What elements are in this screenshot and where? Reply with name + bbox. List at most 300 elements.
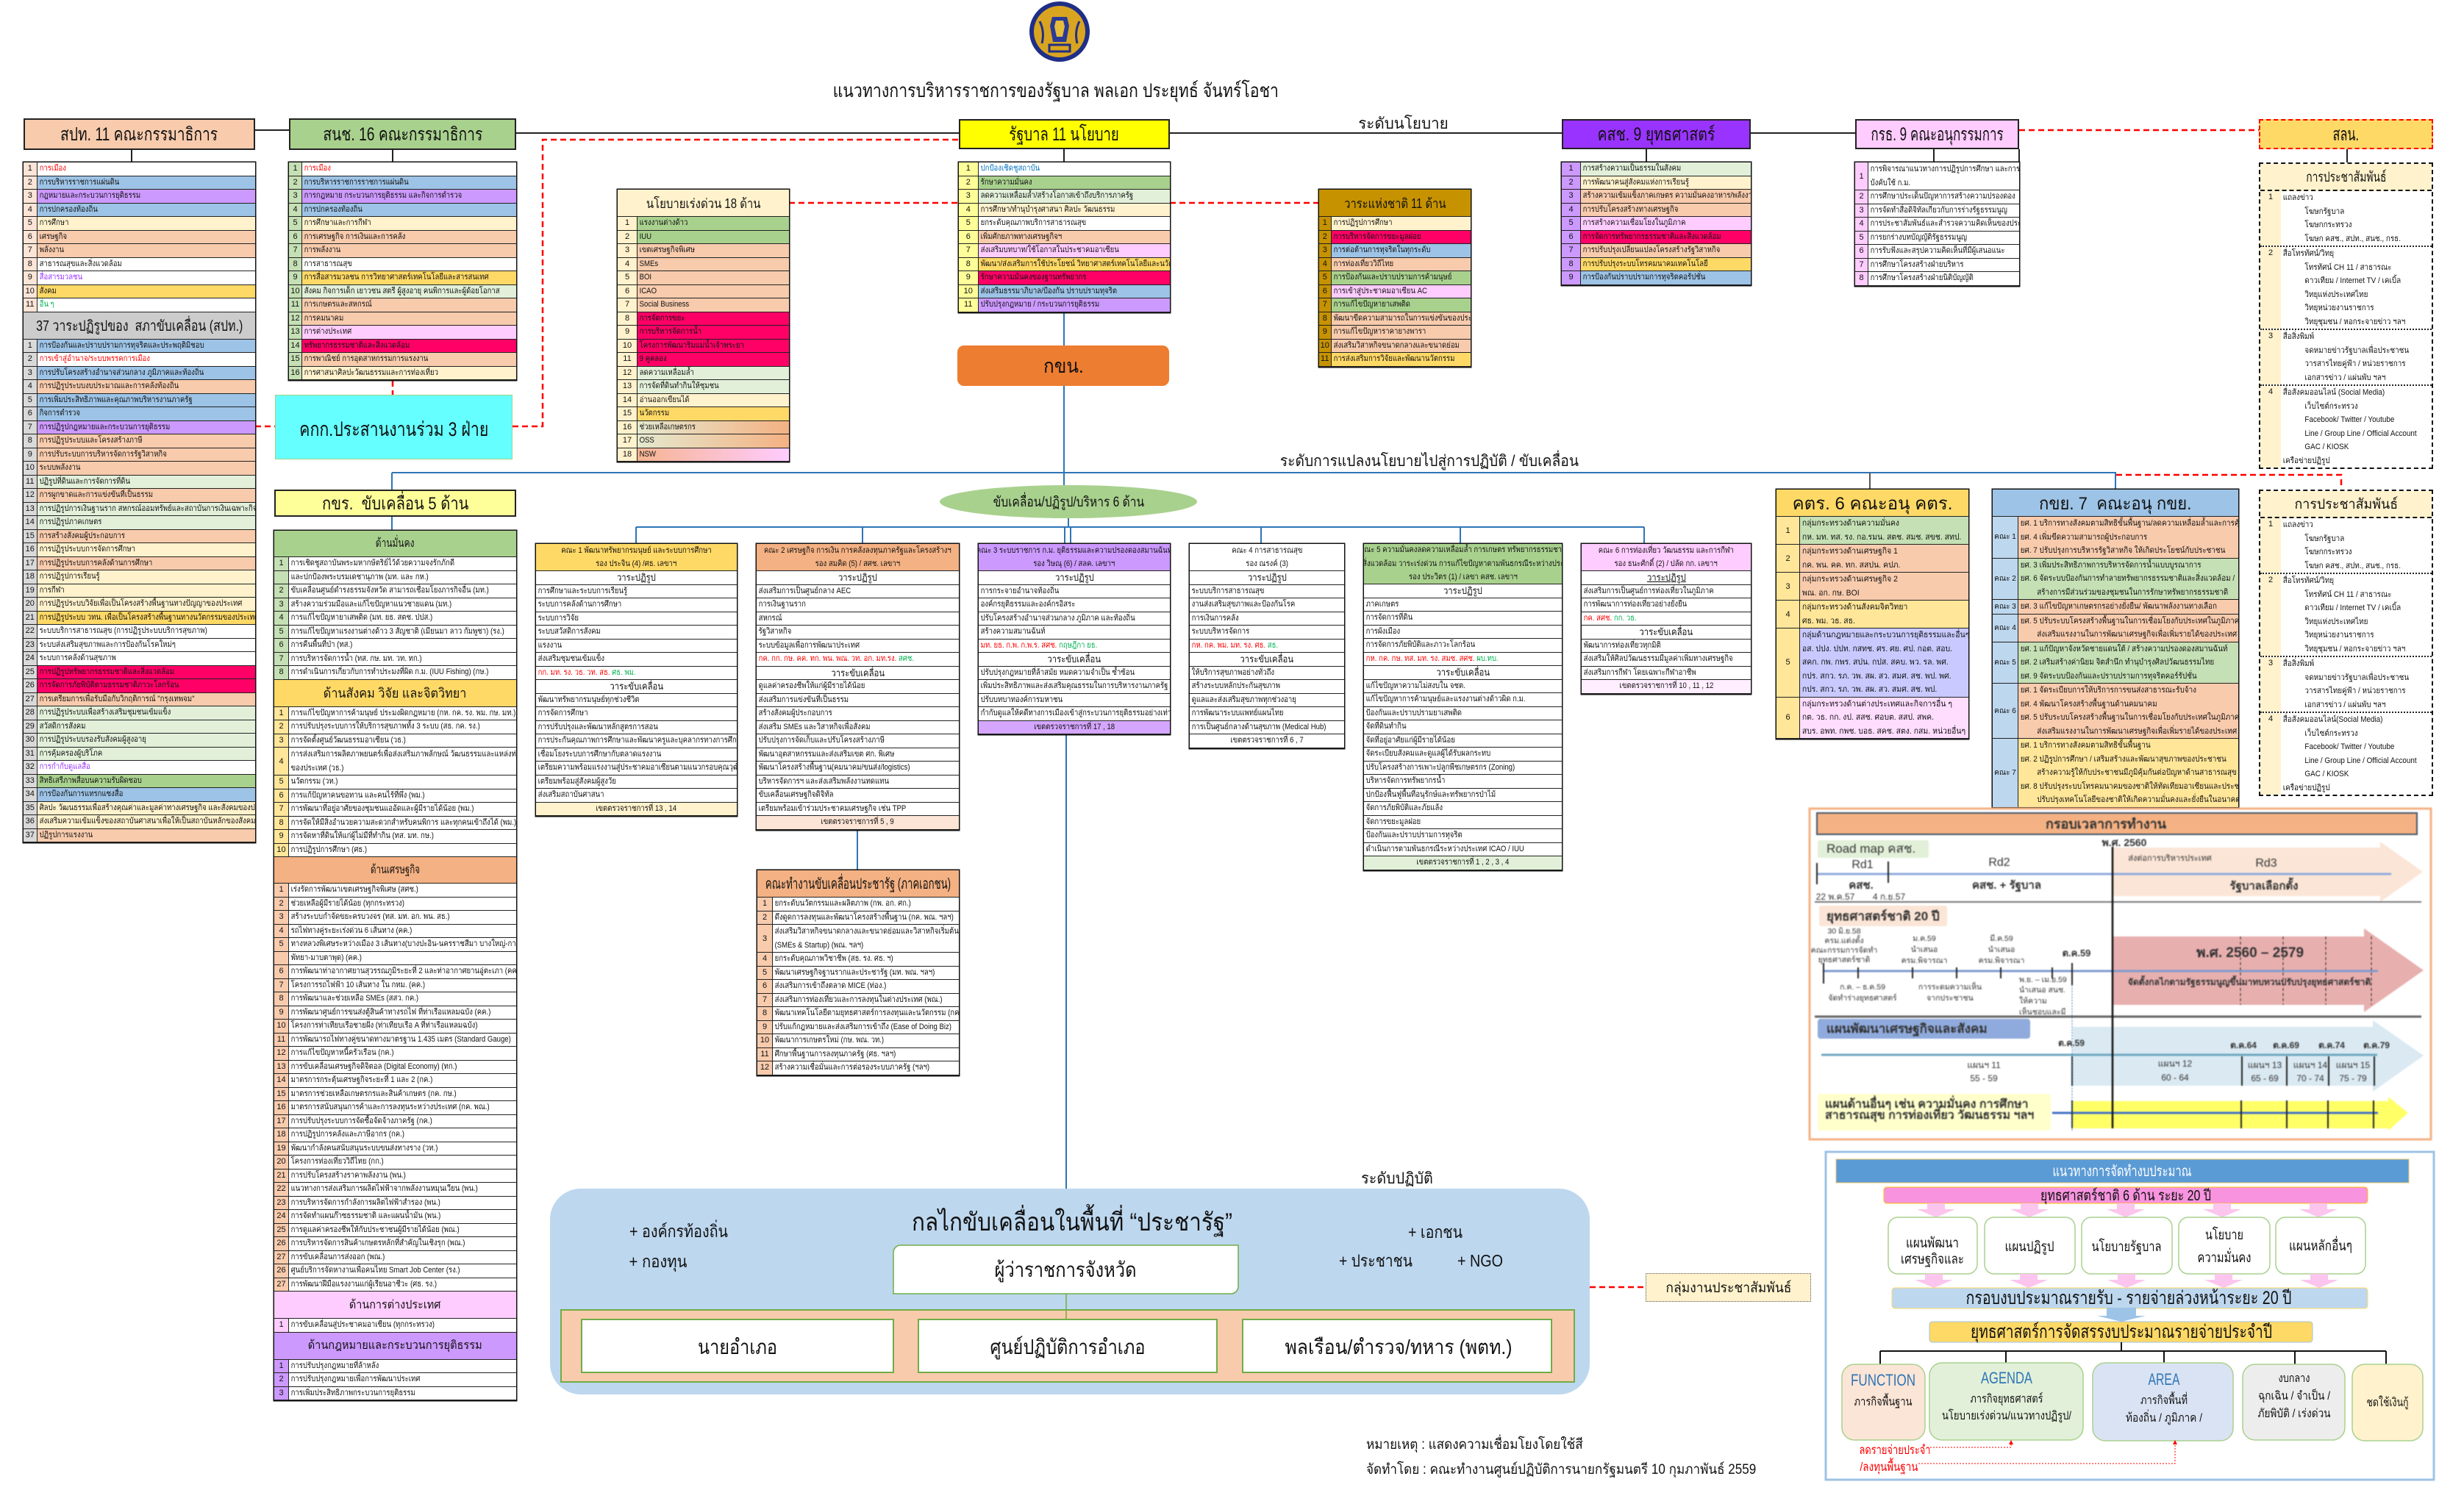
list: team 4 agendas: งานส่งเสริมสุขภาพและป้องกันโรค xyxy=(1192,600,1295,609)
banner: annual budget allocation strategy: ยุทธศาสตร์การจัดสรรงบประมาณรายจ่ายประจำปี xyxy=(1971,1322,2272,1343)
list: society, research and psychology: 2 xyxy=(279,722,284,731)
panel: NRSA committees and 37 reform agendas: สาธารณสุขและสิ่งแวดล้อม xyxy=(39,259,121,268)
arrow: national strategy 20 years: นำเสนอ xyxy=(1988,945,2015,954)
list: KorTorRor groups: กลุ่มกระทรวงด้านเศรษฐกิจ 1 xyxy=(1802,547,1898,556)
list: economy: มาตรการสนับสนุนการค้าและการลงทุนระหว่างประเทศ (กค. พณ.) xyxy=(291,1103,490,1111)
box: district operations centre xyxy=(918,1319,1217,1372)
list: civil-state working group items: (SMEs & Startup) (พณ. ฯลฯ) xyxy=(775,941,863,950)
arrow: economic and social development plans: ต.ค.59 xyxy=(2058,1038,2085,1048)
heading: law and justice xyxy=(274,1332,516,1360)
panel: government 11 policies list: 7 xyxy=(966,246,971,254)
arrow: roadmap: Rd1 xyxy=(1851,859,1874,871)
panel: NCPO 9 strategies list: 8 xyxy=(1568,259,1574,268)
panel: NLA 16 committees list: การเมือง xyxy=(304,164,331,173)
list: 37 reform agendas: สวัสดิการสังคม xyxy=(39,722,85,731)
list: 37 reform agendas: 3 xyxy=(28,368,32,377)
header: NLA 16 committees xyxy=(289,118,516,150)
ellipse: drive, implement, manage 6 areas: ขับเคลื่อน/ปฏิรูป/บริหาร 6 ด้าน xyxy=(993,494,1144,510)
panel: NLA 16 committees list: 8 xyxy=(293,259,298,268)
list: security: การเชิดชูสถาบันพระมหากษัตริย์ไว้ด้วยความจงรักภักดี xyxy=(291,559,454,567)
boxes: five master plans: แผนหลักอื่นๆ xyxy=(2289,1236,2352,1254)
list: 37 reform agendas: 24 xyxy=(26,653,35,662)
list: economy: 10 xyxy=(276,1021,286,1030)
list: 37 reform agendas: 8 xyxy=(28,436,32,445)
list: 37 reform agendas: กิจการตำรวจ xyxy=(39,409,80,418)
list: KorKhorYor groups: คณะ 5 xyxy=(1994,659,2016,667)
box: KorKhorNor committee xyxy=(957,345,1169,386)
list: 37 reform agendas: ส่งเสริมความเข้มแข็งของสถาบันศาสนาเพื่อให้เป็นสถาบันหลักของสังคม xyxy=(39,817,255,825)
list: KorTorRor groups: 2 xyxy=(1785,554,1790,563)
heading: team 4: รอง ณรงค์ (3) xyxy=(1246,559,1288,568)
list: society, research and psychology: การจัดให้มีสิ่งอำนวยความสะดวกสำหรับคนพิการ และทุกคนเข้าถึงได้ (พม.) xyxy=(291,818,516,827)
arrow: national strategy 20 years: 30 มิ.ย.58 xyxy=(1827,927,1861,936)
box: agenda: AGENDA xyxy=(1981,1369,2032,1387)
heading: team 5: รอง ประวิตร (1) / เลขา คสช. เลขาฯ xyxy=(1409,573,1517,581)
list: urgent policies: 7 xyxy=(625,300,629,309)
box: central budget: งบกลาง xyxy=(2278,1372,2310,1385)
panel: deputy PM team 3 xyxy=(979,544,1170,734)
list: KorTorRor groups: พณ. อก. กษ. BOI xyxy=(1802,588,1860,597)
list: economy: 17 xyxy=(276,1117,286,1125)
list: team 1 agendas: วาระปฏิรูป xyxy=(617,572,656,583)
list: public relations channels: Line / Group Line / Official Account xyxy=(2304,756,2417,764)
box: civil police military: พลเรือน/ตำรวจ/ทหาร (พตท.) xyxy=(1285,1336,1512,1358)
list: public relations channels: เว็บไซต์กระทรวง xyxy=(2304,729,2358,738)
list: public relations channels: วิทยุแห่งประเทศไทย xyxy=(2304,617,2368,626)
list: public relations channels: วารสารไทยคู่ฟ้า / หน่วยราชการ xyxy=(2304,687,2406,695)
list: 37 reform agendas: ระบบการคลังด้านสุขภาพ xyxy=(39,653,115,662)
panel: government 11 policies list: 9 xyxy=(966,273,971,282)
list: KorKhorYor groups: คณะ 2 xyxy=(1994,575,2016,583)
list: national agenda: 4 xyxy=(1323,259,1327,268)
panel: NRSA committees and 37 reform agendas: 7 xyxy=(28,246,32,254)
text block: prepared by: จัดทำโดย : คณะทำงานศูนย์ปฏิบัติการนายกรัฐมนตรี 10 กุมภาพันธ์ 2559 xyxy=(1366,1462,1756,1478)
list: national agenda: การแก้ไขปัญหาราคายางพารา xyxy=(1333,327,1426,336)
list: team 3 agendas: วาระขับเคลื่อน xyxy=(1048,653,1101,665)
list: urgent policies: BOI xyxy=(640,273,651,282)
list: KorKhorYor groups: ยศ. 2 ปฏิรูปการศึกษา / เสริมสร้างและพัฒนาสุขภาพของประชาชน xyxy=(2021,754,2226,763)
panel: NLA 16 committees list: การพลังงาน xyxy=(304,246,340,254)
panel: NCPO 9 strategies list: การสร้างความเป็นธรรมในสังคม xyxy=(1583,164,1681,173)
panel: NLA 16 committees list: 7 xyxy=(293,246,298,254)
list: KorKhorYor groups: ยศ. 7 ปรับปรุงการบริหารรัฐวิสาหกิจ ให้เกิดประโยชน์กับประชาชน xyxy=(2021,546,2225,555)
list: economy: 18 xyxy=(276,1130,286,1139)
heading: public relations xyxy=(2260,164,2432,191)
heading: foreign affairs: ด้านการต่างประเทศ xyxy=(349,1298,441,1311)
list: team 1 agendas: วาระขับเคลื่อน xyxy=(610,681,663,692)
list: public relations channels: โฆษก คสช., สปท., สนช., กรธ. xyxy=(2304,234,2401,243)
list: economy: 21 xyxy=(276,1171,286,1180)
heading: team 6 xyxy=(1582,544,1751,571)
list: civil-state working group items: พัฒนาการเกษตรใหม่ (กษ. พณ. วท.) xyxy=(775,1036,884,1045)
list: KorKhorYor groups: คณะ 6 xyxy=(1994,707,2016,714)
arrow: economic and social development plans: ต.ค.64 xyxy=(2230,1040,2257,1050)
list: security: สร้างความร่วมมือและแก้ไขปัญหาแนวชายแดน (มท.) xyxy=(291,600,451,609)
list: economy: 23 xyxy=(276,1198,286,1207)
list: 37 reform agendas: 17 xyxy=(26,559,35,567)
list: economy: 2 xyxy=(279,899,284,908)
panel: government 11 policies list: ส่งเสริมธรรมาภิบาล/ป้องกัน ปราบปรามทุจริต xyxy=(980,287,1117,296)
panel: working timeframe timeline xyxy=(1807,807,2432,1141)
list: foreign affairs: 1 xyxy=(279,1320,284,1329)
arrow: economic and social development plans: แผนฯ 13 xyxy=(2248,1060,2282,1070)
box: function: ภารกิจพื้นฐาน xyxy=(1854,1393,1913,1408)
list: national agenda: 7 xyxy=(1323,300,1327,309)
list: KorKhorYor groups: ยศ. 2 เสริมสร้างค่านิยม จิตสำนึก ทำนุบำรุงศิลปวัฒนธรรมไทย xyxy=(2021,658,2214,667)
arrow: national strategy 20 years: ม.ค.59 xyxy=(1913,934,1936,943)
list: urgent policies: เขตเศรษฐกิจพิเศษ xyxy=(640,246,695,254)
panel: government 11 policies list: 8 xyxy=(966,259,971,268)
panel: government 11 policies list: 6 xyxy=(966,232,971,241)
list: urgent policies: 11 xyxy=(623,354,632,363)
panel: NRSA committees and 37 reform agendas: 2 xyxy=(28,178,32,187)
list: economy: 12 xyxy=(276,1048,286,1057)
icon: cabinet secretariat seal xyxy=(1029,1,1090,62)
heading: budget guidelines xyxy=(1836,1159,2409,1183)
list: security xyxy=(274,557,516,680)
heading: society, research and psychology: ด้านสังคม วิจัย และจิตวิทยา xyxy=(324,686,467,701)
list: economy: 24 xyxy=(276,1211,286,1220)
marker: year 2560 line: พ.ศ. 2560 xyxy=(2102,837,2147,848)
panel: CDC subcommittees list: บังคับใช้ ก.ม. xyxy=(1871,178,1910,187)
heading: security: ด้านมั่นคง xyxy=(376,537,415,550)
panel: NRSA committees and 37 reform agendas: เศรษฐกิจ xyxy=(39,232,67,241)
list: society, research and psychology: การจัดตั้งศูนย์วัฒนธรรมอาเซียน (วธ.) xyxy=(291,736,406,745)
list: 37 reform agendas: 4 xyxy=(28,382,32,390)
list: KorTorRor groups: กลุ่มกระทรวงด้านความมั่นคง xyxy=(1802,519,1899,528)
heading: team 1: รอง ประจิน (4) /ศธ. เลขาฯ xyxy=(596,559,677,568)
list: public relations channels: ดาวเทียม / Internet TV / เคเบิ้ล xyxy=(2304,603,2401,612)
list: public relations channels: โฆษกกระทรวง xyxy=(2304,548,2351,556)
list: civil-state working group items: ดึงดูดการลงทุนและพัฒนาโครงสร้างพื้นฐาน (กค. พณ. ฯลฯ) xyxy=(775,913,954,922)
heading: practice level: ระดับปฏิบัติ xyxy=(1361,1170,1433,1186)
panel: CDC subcommittees list: การรับฟังและสรุปความคิดเห็นที่มีผู้เสนอแนะ xyxy=(1871,246,2004,255)
list: economy: การปรับปรุงระบบการจัดซื้อจัดจ้างภาครัฐ (กค.) xyxy=(291,1117,432,1125)
arrow: roadmap: ส่งต่อการบริหารประเทศ xyxy=(2128,854,2212,863)
list: urgent policies: 8 xyxy=(625,314,629,323)
list: economy: มาตรการกระตุ้นเศรษฐกิจระยะที่ 1 และ 2 (กค.) xyxy=(291,1075,432,1084)
heading: public relations: การประชาสัมพันธ์ xyxy=(2306,169,2386,185)
list: law and justice: การปรับปรุงกฎหมายเพื่อการพัฒนาประเทศ xyxy=(291,1375,420,1383)
panel: public relations (implementation level) xyxy=(2259,490,2433,796)
list: economy: 19 xyxy=(276,1144,286,1153)
list: team 2 agendas: สร้างสังคมผู้ประกอบการ xyxy=(759,709,832,717)
arrow: national strategy 20 years: เห็นชอบและมี xyxy=(2019,1006,2066,1017)
list: civil-state working group items: ส่งเสริมการเข้าถึงตลาด MICE (ท่อง.) xyxy=(775,981,886,990)
heading: team 6: รอง ธนะศักดิ์ (2) / ปลัด กก. เลขาฯ xyxy=(1615,559,1718,568)
list: 37 reform agendas: การจัดการภัยพิบัติตามธรรมชาติภาวะโลกร้อน xyxy=(39,681,179,690)
list: security: 6 xyxy=(279,640,284,649)
panel: NCPO 9 strategies list: การปรับปรุงระบบโทรคมนาคมเทคโนโลยี xyxy=(1583,259,1708,268)
list: national agenda xyxy=(1319,217,1471,367)
arrow: framework to annual strategy xyxy=(2097,1308,2146,1322)
list: public relations channels: เอกสารข่าว / แผ่นพับ ฯลฯ xyxy=(2304,700,2385,709)
list: economy: 5 xyxy=(279,939,284,948)
box: central budget: ฉุกเฉิน / จำเป็น / xyxy=(2258,1388,2330,1403)
panel: CDC subcommittees list: การพิจารณาแนวทางการปฏิรูปการศึกษา และการ xyxy=(1871,165,2019,173)
panel: CDC subcommittees list: การศึกษาประเด็นปัญหาการสร้างความปรองดอง xyxy=(1871,192,2015,201)
list: economy: การปรับโครงสร้างราคาพลังงาน (พน.) xyxy=(291,1171,406,1180)
panel: government 11 policies list: 10 xyxy=(964,287,973,296)
list: economy: การบริหารจัดการกำลังการผลิตไฟฟ้าสำรอง (พน.) xyxy=(291,1198,440,1207)
panel: NLA 16 committees list: การเศรษฐกิจ การเงินและการคลัง xyxy=(304,232,405,241)
callout: public relations group: กลุ่มงานประชาสัมพันธ์ xyxy=(1665,1281,1791,1295)
list: team 5 agendas: การจัดการที่ดิน xyxy=(1366,613,1413,622)
list: economy: 15 xyxy=(276,1089,286,1098)
list: public relations channels: วิทยุหน่วยงานราชการ xyxy=(2304,631,2374,640)
list: KorKhorYor groups: ส่งเสริมแรงงานในการพัฒนาเศรษฐกิจเพื่อเพิ่มรายได้ของประเทศ xyxy=(2037,630,2237,639)
list: public relations channels: สื่อโทรทัศน์/วิทยุ xyxy=(2283,249,2334,258)
list: team 2 agendas: พัฒนาอุตสาหกรรมและส่งเสริมเขต ศก. พิเศษ xyxy=(759,750,894,759)
arrow: national strategy 20 years xyxy=(1811,902,2424,1017)
list: KorTorRor groups: สบร. อพท. กพช. บอธ. สคช. สตง. กสม. หน่วยอื่นๆ xyxy=(1802,726,1965,735)
panel: KorKhorRor 5 areas lists xyxy=(274,531,516,1400)
list: urgent policies: SMEs xyxy=(640,259,658,268)
list: civil-state working group items: สร้างความเชื่อมั่นและการต่อรองระบบภาครัฐ (ฯลฯ) xyxy=(775,1063,929,1072)
panel: NCPO 9 strategies list: การป้องกันปราบปรามการทุจริตคอรัปชั่น xyxy=(1583,273,1705,282)
list: KorTorRor groups: กลุ่มกระทรวงด้านเศรษฐกิจ 2 xyxy=(1802,575,1898,584)
panel: deputy PM team 6 xyxy=(1582,544,1751,694)
list: urgent policies: 5 xyxy=(625,273,629,282)
list: national agenda: 8 xyxy=(1323,314,1327,323)
boxes: five master plans: นโยบาย xyxy=(2205,1226,2243,1243)
heading: team 1 xyxy=(536,544,737,571)
list: KorTorRor groups: 5 xyxy=(1785,658,1790,667)
list: national agenda: 5 xyxy=(1323,273,1327,282)
heading: team 2: รอง สมคิด (5) / สศช. เลขาฯ xyxy=(815,559,900,568)
list: 37 reform agendas: 35 xyxy=(26,803,35,812)
list: national agenda: การท่องเที่ยววิถีไทย xyxy=(1333,259,1393,268)
boxes: five master plans: ความมั่นคง xyxy=(2197,1247,2251,1266)
header: NRSA 11 committees xyxy=(24,118,255,150)
header: government 11 policies: รัฐบาล 11 นโยบาย xyxy=(1010,123,1119,144)
list: team 5 agendas: ปกป้องฟื้นฟูพื้นที่อนุรักษ์และทรัพยากรป่าไม้ xyxy=(1366,790,1496,799)
list: team 5 agendas: จัดระเบียบสังคมและดูแลผู้ได้รับผลกระทบ xyxy=(1366,749,1490,758)
list: public relations channels: โฆษกรัฐบาล xyxy=(2304,534,2344,542)
box: agenda: ภารกิจยุทธศาสตร์ xyxy=(1971,1391,2043,1406)
list: national agenda: การปฏิรูปการศึกษา xyxy=(1333,218,1392,227)
list: team 5 agendas: ภาคเกษตร xyxy=(1366,600,1399,609)
list: society, research and psychology: การพัฒนาที่อยู่อาศัยของชุมชนแออัดและผู้มีรายได้น้อย (พม.) xyxy=(291,804,474,813)
list: public relations channels: สื่อสังคมออนไลน์(Social Media) xyxy=(2283,715,2382,724)
box: area: ภารกิจพื้นที่ xyxy=(2140,1391,2188,1407)
panel: NLA 16 committees list: 13 xyxy=(290,327,300,336)
list: KorTorRor groups: สคก. กพ. กพร. สปน. กปส. สคบ. พว. รล. พศ. xyxy=(1802,658,1949,667)
list: team 5 agendas: ป้องกันและปราบปรามการทุจริต xyxy=(1366,831,1463,839)
list: security: 4 xyxy=(279,613,284,622)
arrow: national strategy 20 years: ครม.พิจารณา xyxy=(1979,956,2024,965)
panel: CDC subcommittees list: 7 xyxy=(1859,260,1864,269)
arrow: national strategy 20 years: จัดทำร่างยุทธศาสตร์ xyxy=(1828,993,1897,1003)
panel: government 11 policies list: 5 xyxy=(966,218,971,227)
list: team 5 agendas: แก้ไขปัญหาการค้ามนุษย์และแรงงานต่างด้าวผิด ก.ม. xyxy=(1366,695,1526,703)
list: economy: 8 xyxy=(279,994,284,1003)
callout: three-party joint coordination committee: คกก.ประสานงานร่วม 3 ฝ่าย xyxy=(299,418,488,440)
list: security: ขับเคลื่อนศูนย์ดำรงธรรมจังหวัด สามารถเชื่อมโยงภารกิจอื่น (มท.) xyxy=(291,586,489,595)
list: team 2 agendas: วาระปฏิรูป xyxy=(838,572,877,583)
list: national agenda: การแก้ไขปัญหายาเสพติด xyxy=(1333,300,1410,309)
header: government 11 policies xyxy=(959,119,1170,149)
list: economy: ช่วยเหลือผู้มีรายได้น้อย (ทุกกระทรวง) xyxy=(291,899,404,908)
list: urgent policies: โครงการพัฒนาริมแม่น้ำเจ้าพระยา xyxy=(640,341,744,350)
list: economy: พัฒนากำลังคนสนับสนุนระบบขนส่งทางราง (วท.) xyxy=(291,1144,438,1153)
panel: area mechanism Pracharat xyxy=(550,1189,1590,1394)
list: 37 reform agendas: 31 xyxy=(26,749,35,758)
list: KorTorRor groups: กต. วธ. กก. งป. สสช. ศอบต. สสป. สพค. xyxy=(1802,713,1934,722)
panel: NCPO 9 strategies list: การปรับปรุงเปลี่ยนแปลงโครงสร้างรัฐวิสาหกิจ xyxy=(1583,246,1720,254)
list: 37 reform agendas: 19 xyxy=(26,586,35,595)
list: 37 reform agendas: 27 xyxy=(26,695,35,703)
arrow: economic and social development plans: แผนฯ 14 xyxy=(2293,1060,2328,1070)
list: economy: การพัฒนารถไฟทางคู่ขนาดทางมาตรฐาน 1.435 เมตร (Standard Gauge) xyxy=(291,1035,511,1044)
panel: NRSA committees and 37 reform agendas: 8 xyxy=(28,259,32,268)
list: team 2 agendas: ขับเคลื่อนเศรษฐกิจดิจิทัล xyxy=(759,790,834,799)
list: team 5 agendas: จัดการขยะมูลฝอย xyxy=(1366,817,1421,826)
list: 37 reform agendas: การปฏิรูปกฎหมายและกระบวนการยุติธรรม xyxy=(39,423,170,431)
heading: society, research and psychology xyxy=(274,679,516,707)
list: security: การแก้ไขปัญหาแรงงานต่างด้าว 3 สัญชาติ (เมียนมา ลาว กัมพูชา) (รง.) xyxy=(291,627,504,636)
list: society, research and psychology: 4 xyxy=(279,757,284,766)
list: society, research and psychology xyxy=(274,707,516,857)
list: civil-state working group items: 6 xyxy=(763,981,767,990)
panel: NCPO 9 strategies list: 2 xyxy=(1568,178,1574,187)
arrow: national strategy 20 years: นำเสนอ สนช. xyxy=(2019,986,2065,995)
list: civil-state working group items: ยกระดับนวัตกรรมและผลิตภาพ (กพ. อก. ศก.) xyxy=(775,899,911,908)
list: team 5 agendas: เขตตรวจราชการที่ 1 , 2 , 3 , 4 xyxy=(1417,858,1509,867)
panel: NLA 16 committees list: 4 xyxy=(293,205,298,214)
list: public relations channels: เว็บไซต์กระทรวง xyxy=(2304,401,2358,410)
list: public relations channels: GAC / KIOSK xyxy=(2304,770,2349,778)
header: NCPO 9 strategies: คสช. 9 ยุทธศาสตร์ xyxy=(1598,123,1715,144)
banner: budget framework 20 years: กรอบงบประมาณรายรับ - รายจ่ายล่วงหน้าระยะ 20 ปี xyxy=(1966,1288,2291,1308)
panel: NCPO 9 strategies list: การปรับโครงสร้างทางเศรษฐกิจ xyxy=(1583,205,1678,214)
list: society, research and psychology: 10 xyxy=(276,845,286,854)
panel: government 11 policies list: ยกระดับคุณภาพบริการสาธารณสุข xyxy=(980,218,1086,227)
arrow: national strategy 20 years: มี.ค.59 xyxy=(1990,934,2013,943)
panel: NRSA committees and 37 reform agendas: 10 xyxy=(26,287,35,296)
list: team 4 agendas: สร้างระบบหลักประกันสุขภาพ xyxy=(1192,681,1280,690)
list: security: 3 xyxy=(279,600,284,609)
header: KorKhorRor 5 drivers xyxy=(274,490,516,517)
list: team 2 agendas: เขตตรวจราชการที่ 5 , 9 xyxy=(821,817,894,826)
list: 37 reform agendas: 37 xyxy=(26,831,35,839)
list: KorKhorYor groups: ยศ. 1 แก้ปัญหาจังหวัดชายแดนใต้ / สร้างความปรองดองสมานฉันท์ xyxy=(2021,644,2228,653)
list: national agenda: การบริหารจัดการขยะมูลฝอย xyxy=(1333,232,1421,241)
list: team 4 agendas: วาระขับเคลื่อน xyxy=(1240,653,1293,665)
list: KorTorRor groups: กลุ่มกระทรวงด้านต่างประเทศและกิจการอื่น ๆ xyxy=(1802,700,1952,709)
panel: CDC subcommittees list: 1 xyxy=(1859,172,1864,181)
list: national agenda: 1 xyxy=(1323,218,1327,227)
list: urgent policies: 18 xyxy=(623,450,632,459)
panel: CDC subcommittees list xyxy=(1855,162,2019,285)
list: public relations channels: สื่อสังคมออนไลน์ (Social Media) xyxy=(2283,388,2385,397)
list: economy: การปฏิรูปการคลังและภาษีอากร (กค.) xyxy=(291,1130,404,1139)
arrow: national strategy 20 years: ครม.พิจารณา xyxy=(1901,956,1947,965)
list: national agenda: การเข้าสู่ประชาคมอาเซียน AC xyxy=(1333,287,1426,296)
panel: NLA 16 committees list: 11 xyxy=(291,300,299,309)
text: public sector partners: + องค์กรท้องถิ่น xyxy=(629,1219,728,1241)
heading: team 4 xyxy=(1190,544,1344,571)
list: KorKhorYor groups: คณะ 3 xyxy=(1994,603,2016,611)
arrow: economic and social development plans xyxy=(1815,1017,2424,1092)
list: 37 reform agendas: การปฏิรูปการเงินฐานราก สหกรณ์ออมทรัพย์และสถาบันการเงินเฉพาะกิจ xyxy=(39,504,255,513)
box: central budget xyxy=(2243,1364,2345,1440)
heading: Pracharat mechanism: กลไกขับเคลื่อนในพื้นที่ “ประชารัฐ” xyxy=(912,1204,1232,1237)
list: 37 reform agendas: ระบบบริการสาธารณสุข (การปฏิรูประบบบริการสุขภาพ) xyxy=(39,626,207,635)
list: 37 reform agendas: สิทธิเสรีภาพสื่อบนความรับผิดชอบ xyxy=(39,776,141,785)
heading: translating policy level: ระดับการแปลงนโยบายไปสู่การปฏิบัติ / ขับเคลื่อน xyxy=(1279,453,1579,469)
heading: KorKhorYor xyxy=(1993,490,2238,517)
list: team 1 agendas: การศึกษาและระบบการเรียนรู้ xyxy=(538,587,627,595)
arrow: economic and social development plans: แผนพัฒนาเศรษฐกิจและสังคม xyxy=(1826,1022,1988,1037)
list: security: 1 xyxy=(279,559,284,567)
list: team 2 agendas: บริหารจัดการฯ และส่งเสริมพลังงานทดแทน xyxy=(759,777,889,786)
heading: national agenda xyxy=(1319,190,1471,217)
list: 37 reform agendas: การกำกับดูแลสื่อ xyxy=(39,762,90,771)
panel: NCPO 9 strategies list: 4 xyxy=(1568,205,1574,214)
ellipse: drive, implement, manage 6 areas xyxy=(940,485,1197,518)
list: public relations channels: Facebook/ Twitter / Youtube xyxy=(2304,742,2394,751)
list: team 4 agendas: วาระปฏิรูป xyxy=(1248,572,1286,583)
panel: NLA 16 committees list: 1 xyxy=(293,164,298,173)
list: economy: 11 xyxy=(277,1035,285,1044)
heading: team 4: คณะ 4 การสาธารณสุข xyxy=(1232,545,1302,554)
list: economy: รถไฟทางคู่ระยะเร่งด่วน 6 เส้นทาง (คค.) xyxy=(291,926,412,935)
panel: NRSA committees and 37 reform agendas: การศึกษา xyxy=(39,218,68,227)
list: team 1 agendas: การจัดการศึกษา xyxy=(538,709,588,717)
panel: NCPO 9 strategies list: 5 xyxy=(1568,218,1574,227)
arrow: economic and social development plans: 60 - 64 xyxy=(2161,1072,2189,1083)
panel: CDC subcommittees list: 4 xyxy=(1859,219,1864,228)
list: 37 reform agendas: 7 xyxy=(28,423,32,431)
list: team 3 agendas: เขตตรวจราชการที่ 17 , 18 xyxy=(1034,723,1115,731)
list: 37 reform agendas: การปฏิรูประบบการจัดการศึกษา xyxy=(39,545,135,554)
panel: NLA 16 committees list: การกฎหมาย กระบวนการยุติธรรม และกิจการตำรวจ xyxy=(304,191,462,200)
list: urgent policies: ICAO xyxy=(640,287,657,296)
list: civil-state working group items: 8 xyxy=(763,1009,767,1017)
arrows: plans to budget framework xyxy=(1915,1274,2338,1288)
box: area xyxy=(2093,1363,2233,1441)
panel: NLA 16 committees list: การต่างประเทศ xyxy=(304,327,351,336)
list: 37 reform agendas xyxy=(24,340,255,842)
list: team 4 agendas: ระบบบริการสาธารณสุข xyxy=(1192,587,1264,595)
panel: government 11 policies list: การศึกษา/ทำนุบำรุงศาสนา ศิลปะ วัฒนธรรม xyxy=(980,205,1115,214)
list: security: การบริหารจัดการน้ำ (ทส. กษ. มท. วท. ทก.) xyxy=(291,654,422,663)
header: NLA 16 committees: สนช. 16 คณะกรรมาธิการ xyxy=(323,123,482,144)
list: public relations channels: Line / Group Line / Official Account xyxy=(2304,429,2417,438)
list: team 4 agendas: ระบบบริหารจัดการ xyxy=(1192,627,1249,636)
arrow: national strategy 20 years: ครม.แต่งตั้ง xyxy=(1824,935,1864,945)
heading: team 2 xyxy=(757,544,959,571)
text: public sector partners: + กองทุน xyxy=(629,1252,688,1272)
arrow: economic and social development plans: 65 - 69 xyxy=(2251,1073,2279,1084)
arrow: national strategy 20 years: ให้ความ xyxy=(2019,996,2047,1006)
list: team 6 agendas: ส่งเสริมการเป็นศูนย์การท่องเที่ยวในภูมิภาค xyxy=(1584,587,1714,595)
arrow: economic and social development plans: แผนฯ 12 xyxy=(2158,1059,2193,1069)
panel: CDC subcommittees list: 8 xyxy=(1859,273,1864,282)
list: urgent policies: นวัตกรรม xyxy=(640,409,669,418)
list: civil-state working group items: ส่งเสริมวิสาหกิจขนาดกลางและขนาดย่อมและวิสาหกิจเริ่มต้น xyxy=(775,927,959,936)
list: team 1 agendas: ระบบการวิจัย xyxy=(538,614,579,623)
list: 37 reform agendas: การเข้าสู่อำนาจ/ระบบพรรคการเมือง xyxy=(39,354,149,363)
list: society, research and psychology: 7 xyxy=(279,804,284,813)
connector: red dashed coordination links xyxy=(255,130,2341,1287)
header: Secretariat of the PM: สลน. xyxy=(2333,123,2359,144)
list: KorTorRor groups: ศธ. พม. วธ. สธ. xyxy=(1802,616,1855,625)
list: economy: 13 xyxy=(276,1062,286,1071)
list: economy: 6 xyxy=(279,967,284,975)
list: economy: พัทยา-มาบตาพุด) (คค.) xyxy=(291,953,362,962)
